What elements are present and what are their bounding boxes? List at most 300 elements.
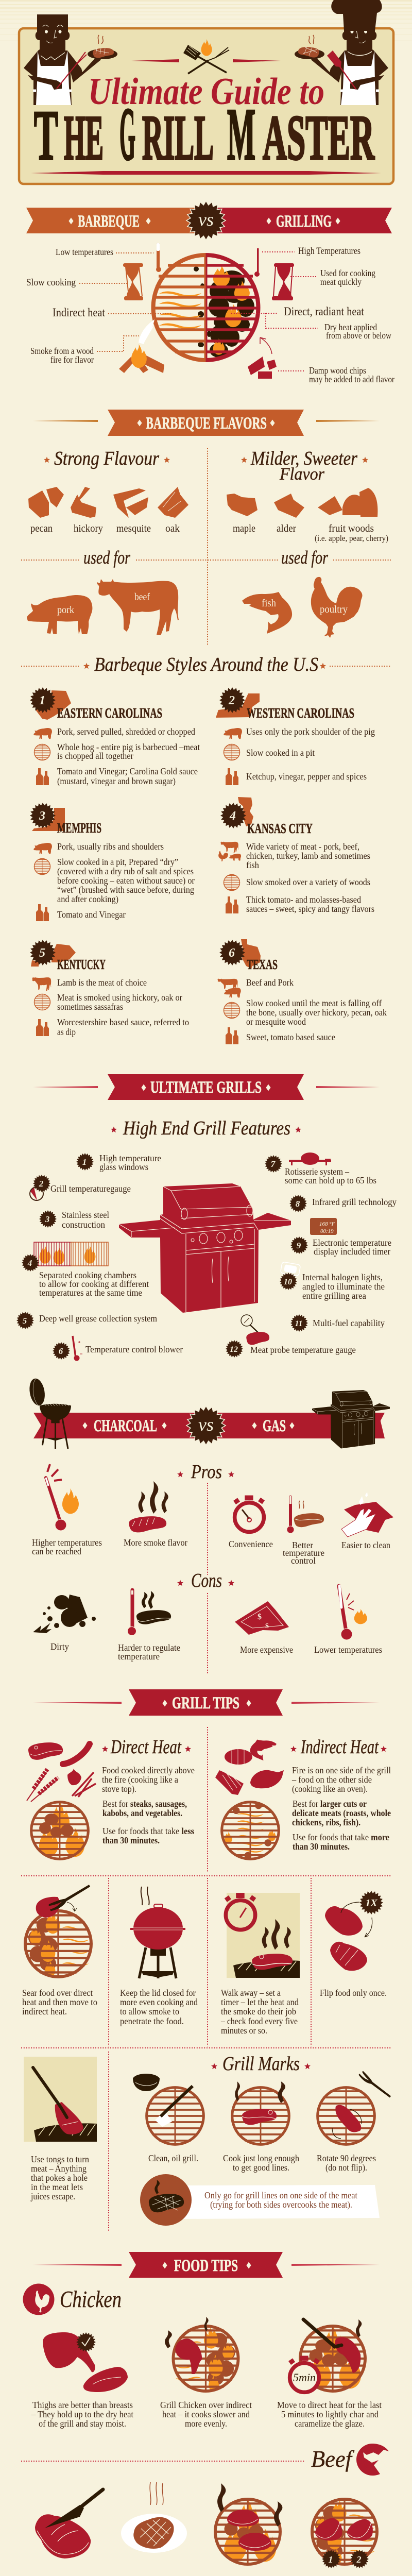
icon: chicken on indirect side <box>165 2317 239 2392</box>
icon: scored steak and knife <box>35 2489 103 2558</box>
banner: grill tips <box>33 1689 380 1716</box>
icon: direct grill <box>30 1802 89 1859</box>
icons <box>33 728 52 785</box>
icon: money: $ <box>258 1613 262 1621</box>
header: KENTUCKY <box>57 957 106 972</box>
icon: pork: pork <box>57 604 74 616</box>
heading: milder sweeter flavor <box>241 448 368 484</box>
text: chicken, turkey, lamb and sometimes <box>246 851 370 861</box>
header <box>30 803 101 836</box>
labels: grilling side: meat quickly <box>320 277 362 287</box>
text: captions: more evenly. <box>185 2418 227 2429</box>
labels: wood names: fruit woods <box>329 523 374 534</box>
icon: campfire and smoke <box>119 319 164 373</box>
text: Thick tomato- and molasses-based <box>246 894 361 905</box>
text <box>22 1988 97 2016</box>
text <box>102 1765 195 1845</box>
text: Slow smoked over a variety of woods <box>246 877 370 887</box>
feature 9: 00:19 <box>320 1228 334 1234</box>
text: Ketchup, vinegar, pepper and spices <box>246 771 367 782</box>
icon: grill with rotated steak <box>317 2070 393 2145</box>
icon: high temperature <box>46 1464 79 1531</box>
labels: wood names: mesquite <box>116 523 151 534</box>
text: captions: Clean, oil grill. <box>148 2153 198 2163</box>
text: the smoke do their job <box>221 2006 296 2016</box>
text: captions: caramelize the glaze. <box>295 2418 365 2429</box>
icon: beef: beef <box>134 591 150 603</box>
text: cons labels: temperature <box>118 1651 160 1662</box>
text <box>220 1988 299 2036</box>
icon: grill with tongs and oil <box>133 2074 204 2145</box>
card background <box>19 28 393 184</box>
header <box>30 687 162 721</box>
heading: barbeque styles around the us: Barbeque Styles Around the U.S <box>94 654 318 675</box>
labels: grilling side: Dry heat applied <box>324 322 377 332</box>
text: Tomato and Vinegar <box>57 909 126 920</box>
feature 7: 7 <box>271 1159 276 1169</box>
labels: grilling side: from above or below <box>326 330 391 341</box>
text: Walk away – set a <box>221 1988 281 1998</box>
text: (mustard, vinegar and brown sugar) <box>57 776 176 786</box>
text: fish <box>246 860 259 870</box>
icons <box>217 978 241 1044</box>
header: EASTERN CAROLINAS <box>57 705 162 721</box>
text: captions <box>35 2575 382 2576</box>
divider lines <box>21 1727 391 2232</box>
text: pros labels <box>32 1537 390 1566</box>
text <box>57 977 189 1037</box>
icon: poultry <box>311 577 363 638</box>
divider lines <box>207 1483 208 1673</box>
text: cons labels <box>50 1641 382 1662</box>
text: Keep the lid closed for <box>120 1988 196 1998</box>
text: Use for foods that take less <box>102 1826 194 1836</box>
feature 4: Separated cooking chambers <box>39 1270 136 1280</box>
text <box>57 726 200 786</box>
icons: foods <box>27 1742 96 1802</box>
panel: title card <box>19 0 393 184</box>
banner: barbeque flavors: BARBEQUE FLAVORS <box>146 414 267 433</box>
feature 3: 3 <box>45 1214 50 1224</box>
feature 6: 6 <box>59 1346 63 1356</box>
text: kabobs, and vegetables. <box>102 1808 182 1818</box>
text: pros labels: can be reached <box>32 1546 81 1556</box>
feature 2: 2 <box>39 1179 44 1189</box>
heading: Grill Marks <box>222 2053 300 2075</box>
labels: barbeque side: Indirect heat <box>53 306 106 319</box>
header: WESTERN CAROLINAS <box>247 705 354 721</box>
text: stove top). <box>102 1784 136 1794</box>
text: – food on the other side <box>291 1774 372 1785</box>
feature 1: High temperature <box>99 1153 161 1163</box>
illustration <box>325 1891 383 1971</box>
heading <box>23 2283 122 2315</box>
heading: Beef <box>311 2446 355 2472</box>
heading: high end grill features: High End Grill Features <box>123 1117 290 1139</box>
text: penetrate the food. <box>120 2016 184 2026</box>
text: Best for larger cuts or <box>293 1799 367 1809</box>
title: the grill master: T <box>34 96 58 175</box>
text <box>246 841 374 914</box>
labels: barbeque side: Smoke from a wood <box>30 346 94 356</box>
text: Slow cooked in a pit, Prepared “dry” <box>57 857 178 867</box>
labels: wood names <box>30 523 388 543</box>
text: indirect heat. <box>22 2006 67 2016</box>
text: timer – let the heat and <box>221 1997 299 2007</box>
icon: cloth and hand <box>341 1492 393 1537</box>
icon: sear then move: 2 <box>356 2554 362 2565</box>
panel: grill features <box>16 1153 397 1361</box>
text: captions: Rotate 90 degrees <box>317 2153 376 2163</box>
panel: texas <box>217 939 387 1044</box>
panel: barbeque vs grilling <box>26 201 394 384</box>
panel: flip once tip <box>320 1891 387 1998</box>
icons <box>33 843 52 921</box>
text: pros labels: Higher temperatures <box>32 1537 102 1548</box>
text: Use tongs to turn <box>31 2154 89 2164</box>
text: Lamb is the meat of choice <box>57 977 147 988</box>
banner: food tips <box>33 2252 380 2278</box>
feature 11: Multi-fuel capability <box>313 1318 385 1328</box>
text: meat – Anything <box>31 2163 87 2174</box>
text: captions: Thighs are better than breasts <box>32 2400 133 2410</box>
header: 4 <box>229 809 236 823</box>
labels: wood names: pecan <box>30 523 53 534</box>
header <box>220 797 313 836</box>
labels: grilling side <box>284 246 394 384</box>
feature 12: Meat probe temperature gauge <box>250 1345 356 1355</box>
text: Wide variety of meat - pork, beef, <box>246 841 359 852</box>
decorative title rules <box>31 59 381 175</box>
feature 7 <box>265 1153 376 1185</box>
illustration <box>24 2057 97 2142</box>
labels: grilling side: Used for cooking <box>320 268 375 278</box>
feature 10 <box>280 1262 385 1301</box>
badge: vs <box>186 201 226 240</box>
text: “wet” (brushed with sauce before, during <box>57 885 194 895</box>
icon: crossed spatula and fork with flame <box>183 39 229 74</box>
feature 4: to allow for cooking at different <box>39 1279 149 1289</box>
text: sauces – sweet, spicy and tangy flavors <box>246 904 374 914</box>
header <box>30 940 106 972</box>
header: 1 <box>39 694 45 707</box>
feature 8: Infrared grill technology <box>312 1197 397 1207</box>
feature 5: 5 <box>23 1316 27 1326</box>
feature 9: display included timer <box>314 1246 390 1257</box>
text: Whole hog - entire pig is barbecued –meat <box>57 742 200 752</box>
icons <box>224 728 242 785</box>
title: the grill master: HE <box>64 103 104 173</box>
labels: wood names: oak <box>165 523 180 534</box>
icon: beef <box>97 579 179 635</box>
text: captions: Grill Chicken over indirect <box>160 2400 252 2410</box>
icon: pork <box>27 595 92 634</box>
icon: chicken with timer: 5min <box>293 2371 316 2384</box>
heading: used for: used for <box>83 547 131 568</box>
labels: barbeque side: Low temperatures <box>56 247 113 257</box>
dotted leader lines <box>79 252 318 371</box>
text: Sweet, tomato based sauce <box>246 1032 335 1042</box>
feature 11: 11 <box>295 1319 303 1328</box>
banner: grilling: GRILLING <box>276 212 332 231</box>
header: 5 <box>39 946 45 960</box>
feature 5: Deep well grease collection system <box>39 1313 157 1324</box>
icon: right thermometer <box>254 248 260 277</box>
feature 5 <box>16 1312 157 1329</box>
icon: sear then move: 1 <box>329 2554 333 2565</box>
banner: barbeque flavors <box>33 410 380 436</box>
text: Worcestershire based sauce, referred to <box>57 1017 189 1027</box>
heading <box>21 2444 389 2476</box>
icon: thermometer and steak <box>287 1496 324 1533</box>
labels: barbeque side <box>26 247 113 365</box>
labels: grilling side: Direct, radiant heat <box>284 305 365 318</box>
icon: thighs and breast <box>43 2332 128 2392</box>
text: and after cooking) <box>57 894 118 904</box>
icons: strong woods <box>28 487 377 518</box>
banner: ultimate grills: ULTIMATE GRILLS <box>150 1078 262 1097</box>
feature 1: glass windows <box>99 1162 148 1172</box>
heading: Chicken <box>60 2286 122 2312</box>
panel: chicken <box>23 2283 382 2429</box>
icon: dirty coal <box>33 1595 96 1633</box>
text: captions: – They hold up to the dry heat <box>31 2409 133 2419</box>
icon: orange hourglass <box>123 263 143 300</box>
panel: walk away tip <box>220 1893 300 2036</box>
text: captions: of the grill and stay moist. <box>39 2418 126 2429</box>
heading: pros: Pros <box>191 1461 222 1483</box>
text: Meat is smoked using hickory, oak or <box>57 992 182 1003</box>
text: Uses only the pork shoulder of the pig <box>246 726 375 737</box>
feature 7: some can hold up to 65 lbs <box>285 1175 376 1185</box>
text: captions <box>31 2400 382 2429</box>
text: cons labels: More expensive <box>240 1645 293 1655</box>
panel: charcoal vs gas <box>27 1377 390 1449</box>
text: captions: heat – it cooks slower and <box>162 2409 250 2419</box>
text: more even cooking and <box>120 1997 198 2007</box>
text: (cooking like an oven). <box>292 1784 368 1794</box>
text: Sear food over direct <box>22 1988 93 1998</box>
feature 9: 168 °F <box>319 1221 335 1227</box>
icon: damp wood chips <box>248 337 277 379</box>
banner: CHARCOAL <box>94 1417 157 1435</box>
text: in the meat lets <box>31 2182 83 2192</box>
text <box>246 977 387 1042</box>
banner: barbeque <box>26 208 196 233</box>
feature 2: Grill temperaturegauge <box>50 1183 131 1194</box>
panel: kentucky <box>30 940 189 1037</box>
text <box>291 1765 391 1852</box>
heading: strong flavour: Strong Flavour <box>54 448 159 469</box>
text <box>57 841 195 920</box>
text: heat and then move to <box>22 1997 97 2007</box>
icon: poultry: poultry <box>320 604 348 615</box>
icon: left thermometer <box>156 243 161 272</box>
feature 7: Rotisserie system – <box>285 1166 349 1177</box>
icon: sear then move <box>311 2499 378 2568</box>
heading: milder sweeter flavor: Flavor <box>279 465 325 484</box>
text: cons labels: Dirty <box>50 1641 69 1652</box>
header <box>216 687 354 721</box>
text: captions <box>148 2153 376 2173</box>
text: than 30 minutes. <box>293 1841 350 1852</box>
feature 12 <box>226 1315 356 1358</box>
text: captions: to get good lines. <box>233 2162 289 2173</box>
title: ultimate guide to: Ultimate Guide to <box>88 71 324 113</box>
text: than 30 minutes. <box>102 1835 160 1845</box>
heading: Direct Heat <box>110 1736 182 1758</box>
labels: wood names: alder <box>277 523 296 534</box>
heading: pros <box>177 1461 234 1483</box>
text: Use for foods that take more <box>293 1832 389 1842</box>
heading: milder sweeter flavor: Milder, Sweeter <box>250 448 357 469</box>
text <box>30 2154 89 2201</box>
text: cons labels: Harder to regulate <box>118 1642 180 1653</box>
feature 12: 12 <box>230 1345 238 1354</box>
text: the fire (cooking like a <box>102 1774 178 1785</box>
text: Tomato and Vinegar; Carolina Gold sauce <box>57 766 198 776</box>
feature 3: construction <box>62 1219 105 1230</box>
text: is chopped all together <box>57 751 133 761</box>
feature 10: Internal halogen lights, <box>302 1272 383 1282</box>
feature 1: 1 <box>82 1157 87 1167</box>
illustration <box>225 1893 300 1978</box>
text: Fire is on one side of the grill <box>292 1765 391 1775</box>
text: pros labels: temperature <box>283 1548 324 1558</box>
feature 2 <box>30 1175 131 1200</box>
banner: grilling <box>216 208 392 233</box>
icon: grill with steak and tongs <box>24 1882 92 1977</box>
feature 10: 10 <box>284 1278 292 1286</box>
title: the grill master: M <box>227 94 255 176</box>
illustration: 1X <box>365 1897 377 1909</box>
icon: right chef with hat <box>295 0 388 105</box>
text: – check food every five <box>220 2016 298 2026</box>
icon: money <box>235 1601 289 1635</box>
callout: grill lines tip: (trying for both sides overcooks the meat). <box>210 2199 352 2210</box>
callout: grill lines tip <box>140 2174 380 2226</box>
text: the bone, usually over hickory, pecan, oak <box>246 1007 387 1018</box>
feature 8 <box>289 1195 397 1212</box>
panel: use tongs tip <box>24 2057 97 2201</box>
text: Slow cooked in a pit <box>246 748 315 758</box>
heading: used for <box>83 547 329 568</box>
text: captions: Cook just long enough <box>223 2153 299 2163</box>
panel: keep lid closed tip <box>120 1887 198 2026</box>
text: that pokes a hole <box>31 2173 88 2183</box>
text: to allow smoke to <box>120 2006 179 2016</box>
text <box>246 726 375 782</box>
banner: food tips: FOOD TIPS <box>174 2257 238 2275</box>
icon: fish: fish <box>262 598 276 609</box>
text: Best for steaks, sausages, <box>102 1799 187 1809</box>
feature 4: 4 <box>27 1258 32 1268</box>
feature 9 <box>290 1218 391 1257</box>
feature 3: Stainless steel <box>62 1210 109 1220</box>
icon: left chef <box>24 14 117 105</box>
icon: resting steak on plate <box>121 2482 187 2553</box>
icon: fish <box>242 592 292 634</box>
icon: grill with steak and smoke <box>231 2081 290 2145</box>
text: Food cooked directly above <box>102 1765 195 1775</box>
feature 8: 8 <box>296 1199 300 1209</box>
title: the grill master <box>34 92 375 176</box>
text: pros labels: More smoke flavor <box>124 1537 187 1548</box>
text: captions: Move to direct heat for the last <box>277 2400 382 2410</box>
diagram: half and half grill <box>153 255 259 360</box>
text: Slow cooked until the meat is falling off <box>246 998 382 1008</box>
icon: red gas grill <box>119 1183 291 1313</box>
title: the grill master: RILL <box>142 103 214 173</box>
panel: sear tip <box>22 1882 97 2016</box>
text: captions: 5 minutes to lightly char and <box>281 2409 379 2419</box>
feature 4 <box>22 1242 149 1298</box>
heading: barbeque styles around the us <box>21 654 391 675</box>
icons <box>32 977 51 1036</box>
text: Beef and Pork <box>246 977 294 988</box>
panel: eastern carolinas <box>30 687 200 786</box>
panel: beef <box>21 2444 389 2576</box>
heading: cons: Cons <box>191 1570 222 1591</box>
header: KANSAS CITY <box>247 821 313 836</box>
feature 6: Temperature control blower <box>85 1344 183 1354</box>
header: TEXAS <box>247 957 278 972</box>
feature 4: temperatures at the same time <box>39 1287 142 1298</box>
banner: ultimate grills <box>33 1074 380 1100</box>
feature 9: Electronic temperature <box>313 1238 391 1248</box>
feature 10: angled to illuminate the <box>302 1281 385 1292</box>
icon: chicken with timer <box>288 2319 366 2392</box>
badge: vs: vs <box>198 209 214 230</box>
panel: indirect heat <box>215 1736 391 1859</box>
panel: memphis <box>30 803 195 921</box>
feature 3 <box>39 1210 109 1230</box>
icon: kettle grill <box>130 1887 185 1978</box>
header: 3 <box>39 809 45 823</box>
icons: foods <box>215 1739 284 1795</box>
feature 10: entire grilling area <box>302 1291 366 1301</box>
badge: vs <box>186 1406 226 1445</box>
text: minutes or so. <box>221 2025 267 2036</box>
divider lines <box>21 448 391 645</box>
panel: strong flavour <box>21 448 391 645</box>
text: pros labels: control <box>291 1555 316 1566</box>
text: pros labels: Easier to clean <box>341 1540 390 1550</box>
labels: grilling side: may be added to add flavor <box>309 374 394 384</box>
icon: stopwatch <box>233 1495 265 1532</box>
title: the grill master: G <box>119 92 135 176</box>
text: Flip food only once. <box>320 1988 387 1998</box>
feature 6 <box>53 1336 183 1361</box>
panel: direct heat <box>27 1736 195 1859</box>
icon: dark gas grill <box>312 1390 390 1448</box>
feature 11 <box>290 1314 385 1332</box>
text: before cooking – eaten without sauce) or <box>57 875 195 886</box>
icon: red hourglass <box>272 263 294 300</box>
text: captions: (do not flip). <box>325 2162 367 2173</box>
text: juices escape. <box>30 2191 75 2201</box>
icon: smoky steak <box>129 1481 168 1532</box>
icon: low thermometer and flame <box>339 1586 367 1640</box>
text <box>120 1988 198 2026</box>
banner: grill tips: GRILL TIPS <box>172 1694 239 1713</box>
labels: barbeque side: fire for flavor <box>50 354 94 365</box>
text: as dip <box>57 1027 76 1037</box>
badge: vs: vs <box>198 1414 214 1435</box>
icon: thermometer and dark steak <box>128 1590 171 1635</box>
labels: wood names: (i.e. apple, pear, cherry) <box>315 533 388 543</box>
text: pros labels: Better <box>292 1540 313 1550</box>
